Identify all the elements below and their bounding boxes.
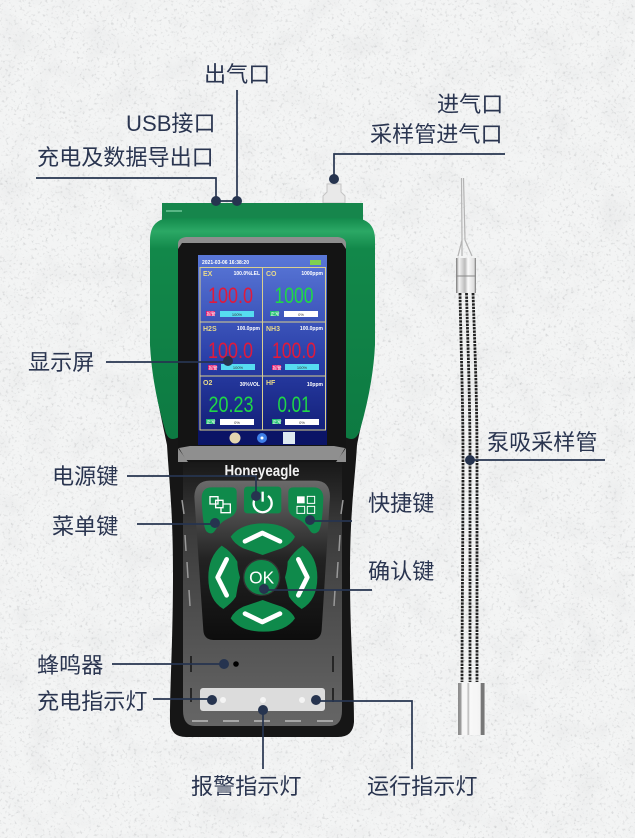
bottom ferrule: [458, 683, 485, 735]
readings: 10ppm: [307, 382, 324, 388]
readings: 100.0: [208, 338, 253, 363]
callout: pump sampling tube: 泵吸采样管: [487, 430, 597, 455]
callout: USB port: 充电及数据导出口: [37, 145, 214, 170]
indicator light panel: [200, 688, 325, 711]
readings: O2: [203, 380, 212, 387]
buzzer hole: [233, 661, 239, 667]
right button: [285, 546, 317, 609]
readings: [203, 271, 324, 426]
readings: 0%: [298, 312, 304, 317]
readings: 100%: [297, 365, 308, 370]
readings: 100.0%LEL: [234, 271, 260, 277]
up button: [231, 523, 295, 555]
inlet nozzle: [323, 184, 345, 203]
callout: air inlet: 采样管进气口: [370, 122, 503, 147]
callout: air inlet: 进气口: [437, 92, 503, 117]
brand name: Honeyeagle: [224, 463, 300, 480]
callout: buzzer: 蜂鸣器: [37, 653, 103, 678]
callout: display: [28, 350, 233, 375]
readings: 0%: [234, 420, 240, 425]
OK button: OK: [249, 567, 275, 587]
callout: pump sampling tube: [465, 430, 605, 465]
shortcut button: [288, 487, 323, 533]
readings: 30%VOL: [240, 382, 260, 388]
needle: [458, 178, 472, 256]
readings: 正常: [206, 418, 216, 426]
callout: alarm light: 报警指示灯: [191, 774, 301, 799]
callout: alarm light: [191, 705, 301, 799]
readings: 报警: [208, 364, 218, 372]
readings: 100.0: [208, 283, 253, 308]
readings: 报警: [206, 310, 216, 318]
callout: buzzer: [37, 653, 229, 678]
readings: 20.23: [208, 392, 254, 417]
green upper body: [150, 218, 375, 439]
readings: CO: [266, 271, 277, 278]
sampling tube: [456, 178, 485, 735]
callout: shortcut key: 快捷键: [368, 491, 434, 516]
status bar: 2021-03-06 16:38:20: [202, 260, 249, 266]
callout: display: 显示屏: [28, 350, 94, 375]
callout: run light: [311, 695, 477, 799]
callout: run light: 运行指示灯: [367, 774, 477, 799]
readings: 正常: [270, 310, 280, 318]
metal collar: [456, 258, 476, 293]
keypad: [194, 481, 330, 640]
menu button: [202, 487, 237, 533]
readings: H2S: [203, 326, 217, 333]
readings: NH3: [266, 326, 280, 333]
callout: confirm key: [259, 559, 434, 594]
top cap: [162, 203, 363, 220]
black lower body: [150, 340, 375, 737]
readings: 100.0ppm: [237, 326, 261, 332]
callout: USB port: USB接口: [126, 111, 216, 136]
callout: charging light: 充电指示灯: [37, 689, 147, 714]
readings: HF: [266, 380, 276, 387]
status bar: [202, 260, 321, 266]
readings: 0.01: [278, 392, 310, 417]
callout: charging light: [37, 689, 217, 714]
readings: 100%: [232, 312, 243, 317]
readings: 1000: [274, 283, 314, 308]
callout: gas outlet: 出气口: [204, 62, 270, 87]
callout: menu key: [52, 514, 220, 539]
callout: air inlet: [329, 92, 505, 184]
readings: 0%: [299, 420, 305, 425]
readings: 1000ppm: [301, 271, 324, 277]
display screen: [198, 255, 327, 445]
OK button: [244, 559, 280, 595]
readings: 100%: [233, 365, 244, 370]
screen icons: [230, 432, 295, 444]
callout: menu key: 菜单键: [52, 514, 118, 539]
screen bezel: [178, 237, 346, 462]
flexible hose: [460, 293, 477, 682]
device: handheld gas detector: [150, 184, 375, 737]
power button: [244, 487, 281, 513]
callout: gas outlet: [204, 62, 270, 206]
left button: [208, 546, 240, 609]
callout: power key: [52, 464, 261, 501]
readings: 100.0: [272, 338, 316, 363]
readings: 正常: [272, 418, 282, 426]
callout: USB port: [36, 111, 237, 206]
readings: 100.0ppm: [300, 326, 324, 332]
readings: EX: [203, 271, 213, 278]
down button: [231, 600, 295, 632]
callout: shortcut key: [305, 491, 434, 525]
readings: 报警: [272, 364, 282, 372]
callout: confirm key: 确认键: [368, 559, 434, 584]
callout: power key: 电源键: [52, 464, 118, 489]
